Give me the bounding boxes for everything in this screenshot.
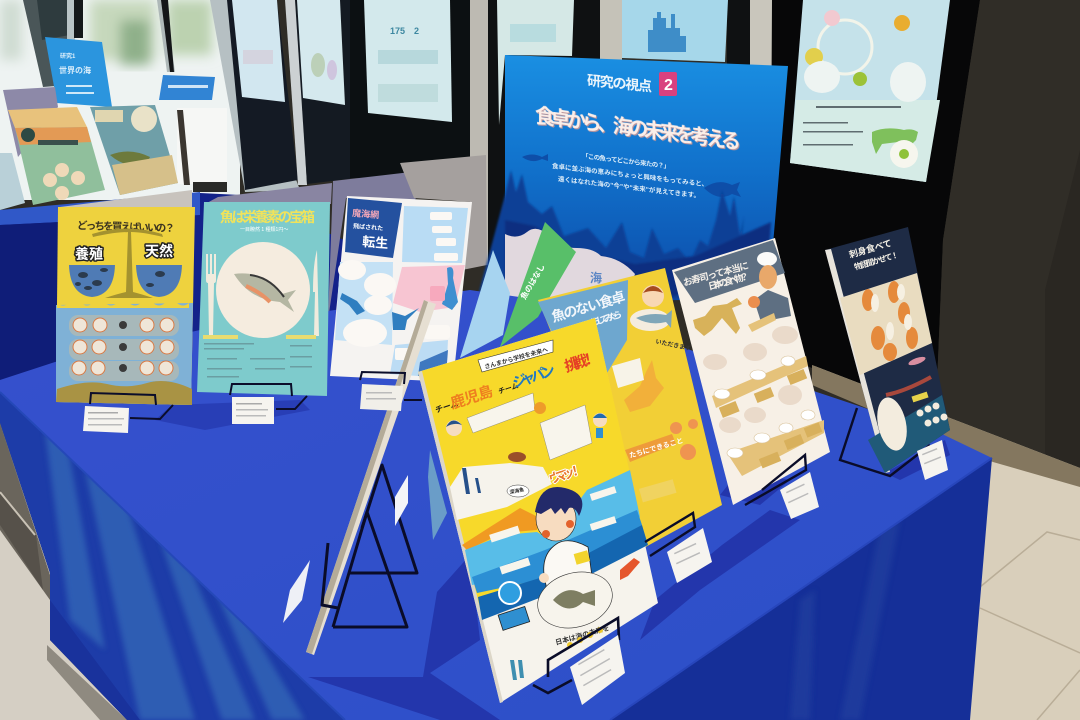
figure: woman: [442, 267, 458, 310]
plate: [216, 242, 310, 338]
small card: table side 2: [395, 475, 408, 526]
fish silhouettes: [522, 154, 741, 197]
poster: wall 3: [364, 0, 452, 122]
board: grey behind poster 1: [60, 190, 192, 208]
poster 6: お寿司って本当に日本の食べ物？: [672, 238, 830, 505]
sign: blue small: [159, 75, 215, 100]
poster: green edge: 魚のはなし: [518, 262, 547, 301]
wave labels: [489, 486, 617, 574]
main title: 食卓から、海の未来を考える: [535, 104, 741, 154]
pan: wild: [136, 243, 182, 297]
fish: [234, 273, 296, 312]
bottom art: [418, 350, 448, 376]
caption card 7: [917, 440, 948, 480]
white info box: [612, 358, 644, 388]
title: チーム: チーム: [434, 399, 459, 415]
poster: back teal yellow: [90, 105, 178, 195]
board: grey back left: [3, 87, 58, 157]
front skirt: [0, 392, 345, 720]
sign: blue back left: 研究1: [60, 52, 76, 60]
caption card 3: [360, 384, 403, 411]
bottom slogan: 日本は海の未来を: [554, 623, 610, 647]
figure: swimmer: [340, 293, 365, 315]
title: 挑戦: 挑戦！: [563, 348, 597, 376]
navy title box: 飛ばされた: [353, 222, 383, 232]
small card: table side 1: [283, 560, 310, 623]
speech box left: [467, 393, 535, 433]
table top: [0, 290, 992, 720]
poster: wall 2: [297, 0, 345, 105]
red row: [886, 377, 931, 395]
edge-on posters in middle: [460, 222, 576, 358]
wire stand: poster 6: [745, 455, 806, 505]
caption: いただきます: [655, 337, 692, 353]
wire stand: poster 2: [230, 384, 307, 409]
navy title box: [345, 198, 402, 258]
fish: [908, 355, 926, 367]
title: チーム second: チーム: [498, 382, 519, 396]
back table with blue cloth: [0, 192, 470, 390]
body text: [552, 151, 708, 200]
title: お寿司って本当に: [682, 260, 750, 288]
large white ellipse: [873, 395, 911, 453]
sand footer: [56, 381, 192, 405]
figure: person: [392, 308, 419, 330]
poster world map: [872, 128, 918, 154]
navy title box: 魔海網: [352, 207, 379, 220]
poster 3: 魔法使い転生: [330, 196, 472, 382]
plate with fish: [531, 564, 619, 636]
title: 鹿児島: 鹿児島: [449, 382, 495, 413]
fork: [206, 254, 216, 335]
table edge highlight: [0, 392, 345, 720]
wire stand: poster 3: [360, 372, 422, 400]
floor: [0, 365, 1080, 720]
side poster left of foreground: [428, 450, 447, 540]
teal lower: [868, 395, 950, 473]
waves: [465, 470, 648, 620]
boy head small right: [593, 413, 607, 438]
wire stand: poster 4: [533, 618, 619, 693]
sign logo: 海: [590, 270, 602, 285]
yellow ducks: [567, 627, 603, 648]
orange hill: [462, 508, 538, 550]
icon rows: [69, 315, 179, 381]
table shadows: [155, 400, 950, 720]
title: 魚は栄養素の宝箱: [220, 209, 315, 225]
large sign: 研究の視点 2: [478, 55, 788, 316]
board: grey behind poster 2: [205, 183, 332, 204]
main boy: [535, 487, 594, 603]
boy head small left: [446, 420, 462, 436]
caption card 2: [232, 397, 274, 424]
white cloud band: [450, 463, 552, 520]
caption card 5: [667, 528, 712, 583]
map badge: [498, 582, 530, 630]
seaweed silhouette: [478, 170, 771, 316]
back row small displays: [0, 37, 487, 320]
navy title box: 転生: [362, 234, 389, 251]
speech box right: [540, 405, 592, 460]
wire stand: poster 5: [645, 513, 695, 556]
poster: light blue edge: [460, 250, 510, 358]
title banner: [478, 340, 553, 372]
labels: [719, 369, 822, 468]
title: どっちを買えばいいの？: [77, 219, 175, 235]
title banner: さんまから学校を未来へ: [484, 345, 549, 371]
subtitle: くらしてみたら: [586, 309, 623, 329]
sushi belts: [712, 313, 824, 476]
shrimp: [508, 452, 526, 462]
cream mid section: [840, 273, 932, 375]
caption card 6: [780, 472, 819, 519]
sign: blue back left: 世界の海: [59, 65, 91, 75]
poster: wall 4: [497, 0, 574, 125]
poster 7: 刺身 dark navy: [825, 227, 950, 473]
orange dishes: [862, 281, 918, 361]
poster 7: 刺身 dark navy: 物語聞かせて！: [853, 249, 900, 272]
balance scale: [92, 228, 163, 298]
poster 1: どっちを買えばいいの？: [56, 207, 195, 405]
title: 魚のない食卓: [550, 288, 627, 325]
poster 4: 鹿児島 foreground yellow: [418, 318, 658, 703]
chef: [748, 252, 791, 322]
pan: wild: 天然: [145, 243, 173, 259]
callout: できること: たちにできること: [629, 437, 684, 460]
poster 2: 魚は栄養素の宝箱: [197, 202, 330, 396]
bubble: 深海魚: 深海魚: [509, 486, 525, 496]
poster: back green orange: [8, 107, 105, 205]
legend: [203, 335, 316, 378]
title: 刺身食べて: [848, 237, 893, 260]
pan: farmed: 養殖: [75, 246, 103, 262]
wire stand under profile poster: [322, 465, 417, 627]
face: [630, 285, 672, 331]
body text: 「この魚ってどこから来たの？」: [582, 151, 670, 171]
speech bubbles: [338, 212, 458, 360]
side edge: [418, 371, 503, 703]
number badge: 2: [664, 77, 673, 94]
poster: wall 3: 175 2: [390, 26, 419, 36]
poster: wall 5 city: [622, 0, 728, 62]
figures in cloud: [462, 468, 481, 494]
board: grey behind poster 3: [328, 170, 428, 320]
board: light behind poster 3: [400, 155, 487, 270]
profile poster with pink tab: [306, 286, 445, 655]
number badge: [659, 72, 677, 96]
tabletop and skirts: [0, 290, 992, 720]
pan: farmed: [69, 246, 115, 297]
wave bottom: [505, 229, 635, 300]
sign: blue back left: [45, 37, 112, 107]
body text: 遠くはなれた海の"今"や"未来"が見えてきます。: [558, 174, 700, 200]
heading label: 研究の視点: [587, 72, 652, 94]
white plates: [871, 284, 912, 340]
subtitle: 一目瞭然 1 種類1円〜: [240, 226, 288, 233]
map: [693, 298, 742, 336]
people bottom: [510, 660, 524, 680]
poster: back far left: [0, 153, 25, 210]
people: [639, 419, 698, 502]
caption card 4: [570, 635, 625, 705]
orange badge: [534, 402, 546, 414]
poster: wall 1: [232, 0, 285, 102]
callout: ウマッ: ウマッ！: [547, 462, 583, 487]
right skirt: [610, 458, 992, 720]
knife: [313, 250, 319, 336]
background posters on wall: [232, 0, 950, 182]
red fish: [620, 558, 640, 580]
wire stand: poster 7: [840, 408, 930, 476]
body text: 食卓に並ぶ海の恵みにちょっと興味をもってみると、: [552, 161, 708, 189]
poster 6: お寿司って本当に日本の食べ物？: 日本の食べ物？: [707, 270, 750, 292]
round list: [916, 402, 948, 426]
bubble: 深海魚: [507, 485, 529, 497]
orange japan map: [624, 360, 664, 412]
poster 5: 魚のない… yellow: [538, 268, 722, 550]
caption card 1: [83, 406, 129, 433]
poster: wall 6 map: [790, 0, 950, 182]
title: ジャパン: ジャパン: [511, 362, 557, 391]
wire stand: poster 1: [90, 393, 173, 419]
plates: [714, 356, 815, 458]
illustrations: [703, 326, 802, 433]
